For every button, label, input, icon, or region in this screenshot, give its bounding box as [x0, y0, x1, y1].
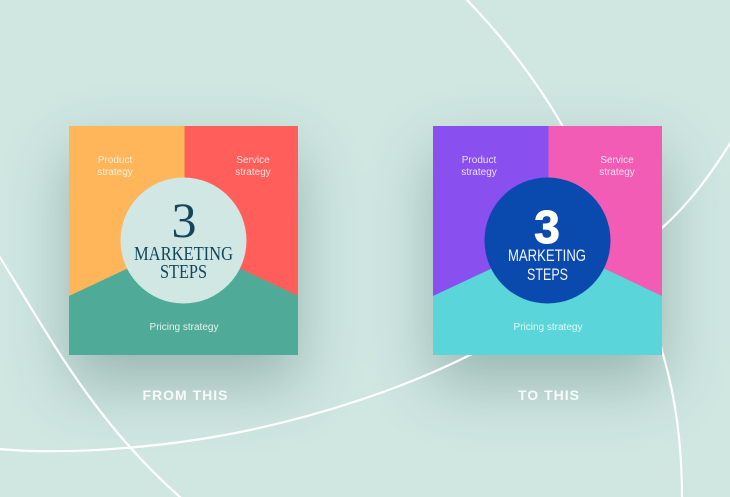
center circle [120, 178, 246, 304]
segment: product strategy [69, 126, 185, 297]
label: product strategy: Product [98, 155, 132, 166]
panel: to this [433, 126, 662, 355]
label: product strategy line 2: strategy [97, 167, 133, 178]
center title line 1: MARKETING [508, 247, 586, 265]
panel shadow: from this [69, 126, 298, 355]
label: service strategy line 2: strategy [599, 167, 635, 178]
panel shadow: to this [433, 126, 662, 355]
panel: from this [69, 126, 298, 355]
center title line 2: STEPS [160, 262, 207, 283]
center circle [484, 178, 610, 304]
caption: to this: TO THIS [518, 387, 579, 403]
segment: service strategy [184, 126, 298, 297]
label: pricing strategy: Pricing strategy [514, 322, 582, 333]
center title line 1: MARKETING [134, 244, 233, 265]
center number: 3 [534, 201, 560, 253]
caption: from this: FROM THIS [142, 387, 228, 403]
label: product strategy line 2: strategy [461, 167, 497, 178]
segment: pricing strategy [69, 242, 298, 355]
segment: pricing strategy [433, 242, 662, 355]
label: service strategy line 2: strategy [235, 167, 271, 178]
label: service strategy: Service [236, 155, 270, 166]
label: pricing strategy: Pricing strategy [150, 322, 218, 333]
center number: 3 [172, 192, 196, 248]
label: product strategy: Product [462, 155, 496, 166]
label: service strategy: Service [600, 155, 634, 166]
center title line 2: STEPS [527, 266, 568, 284]
segment: product strategy [433, 126, 549, 297]
segment: service strategy [548, 126, 662, 297]
